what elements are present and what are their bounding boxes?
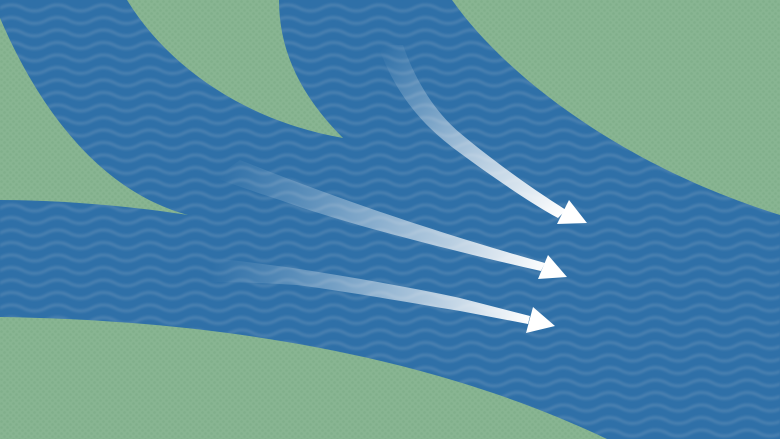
land: top right bank (452, 0, 780, 215)
arrow: bottom arrow (210, 258, 555, 333)
arrow: middle arrow (215, 160, 567, 279)
land: bottom bank (0, 317, 607, 439)
land: top middle wedge (127, 0, 343, 138)
arrow: top curved arrow (378, 45, 587, 224)
land: left bank wedge (0, 18, 188, 215)
